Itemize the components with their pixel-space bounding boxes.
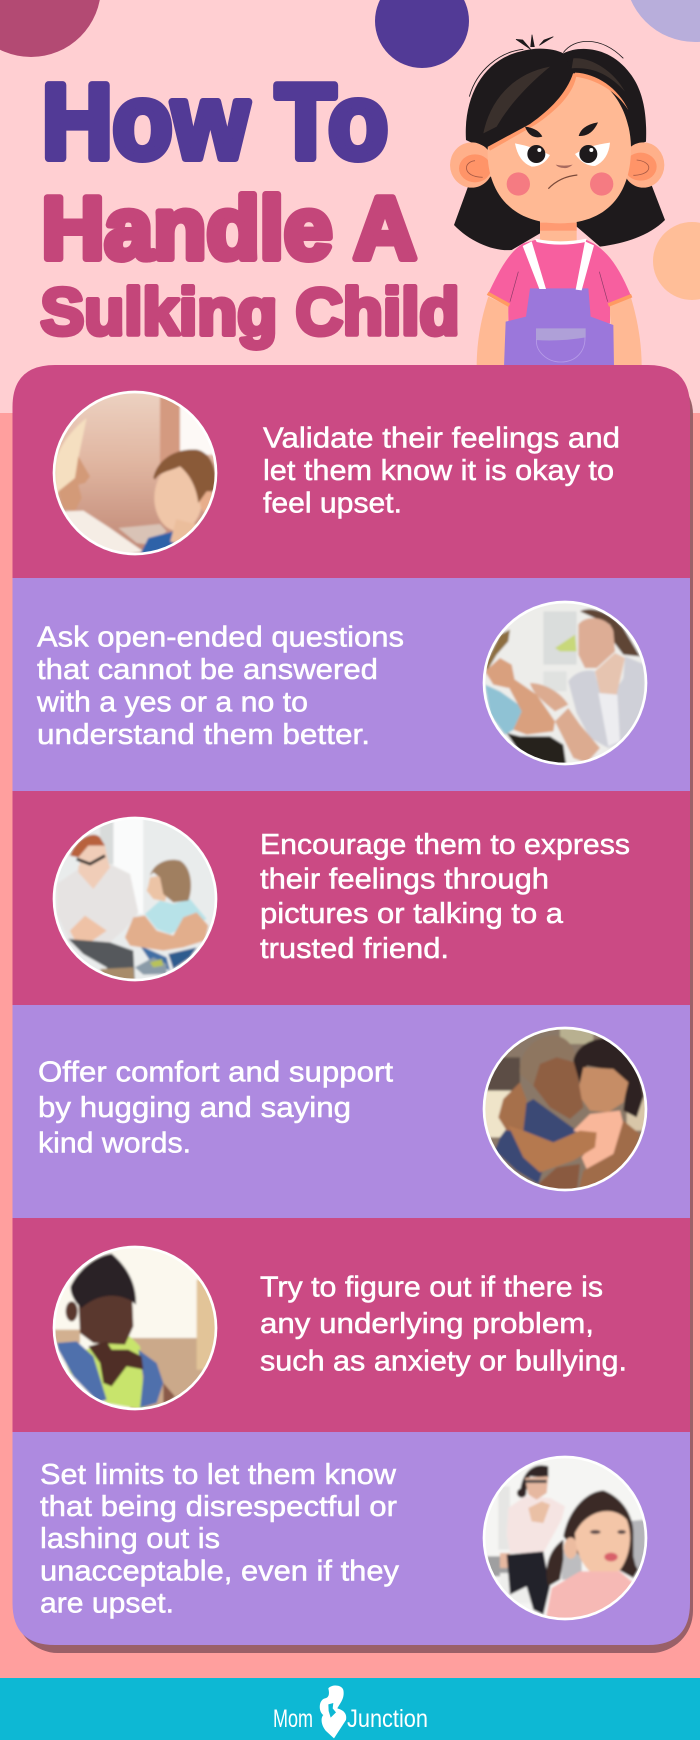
text: set limits: lashing out is xyxy=(40,1523,220,1555)
text: set limits: Set limits to let them know xyxy=(40,1459,396,1491)
title xyxy=(40,63,460,348)
text: offer comfort: kind words. xyxy=(38,1128,191,1160)
decorative circles xyxy=(0,0,700,300)
text: validate feelings: Validate their feelings and xyxy=(263,422,620,454)
text: underlying problem: any underlying problem, xyxy=(260,1308,594,1340)
panel: underlying problem xyxy=(12,1218,690,1432)
logo: MomJunction: Junction xyxy=(347,1705,428,1733)
text: offer comfort: by hugging and saying xyxy=(38,1092,351,1124)
panel: open-ended questions xyxy=(12,578,690,791)
text: validate feelings xyxy=(263,422,620,520)
text: validate feelings: let them know it is okay to xyxy=(263,455,614,487)
icon: mother and child with heart xyxy=(320,1686,346,1738)
photo: mother talking with child xyxy=(480,598,650,768)
text: validate feelings: feel upset. xyxy=(263,488,402,520)
text: open-ended questions: Ask open-ended questions xyxy=(37,622,404,654)
photo: woman and boy sitting xyxy=(50,814,220,984)
text: encourage expression: trusted friend. xyxy=(260,933,449,965)
panel: set limits xyxy=(12,1432,690,1645)
text: open-ended questions: with a yes or a no to xyxy=(36,686,308,718)
panel: offer comfort xyxy=(12,1005,690,1218)
text: open-ended questions: understand them better. xyxy=(37,719,370,751)
logo: MomJunction xyxy=(273,1686,428,1738)
photo: grandmother hugging girl xyxy=(480,1024,650,1194)
footer band xyxy=(0,1678,700,1740)
text: offer comfort: Offer comfort and support xyxy=(38,1056,393,1088)
text: encourage expression: their feelings through xyxy=(260,864,549,896)
photo: sad girl with backpack xyxy=(50,1243,220,1413)
lower background xyxy=(0,413,700,1678)
photo: mother pointing and pouting girl xyxy=(480,1453,650,1623)
header background xyxy=(0,0,700,413)
text: underlying problem xyxy=(260,1272,627,1378)
illustration: sulking girl xyxy=(450,35,665,367)
title: How To xyxy=(42,63,388,181)
text: underlying problem: such as anxiety or bullying. xyxy=(260,1346,627,1378)
text: set limits xyxy=(40,1459,400,1620)
text: set limits: unacceptable, even if they xyxy=(40,1556,400,1588)
panel: validate feelings xyxy=(12,365,690,578)
title: Handle A xyxy=(42,178,416,278)
text: set limits: are upset. xyxy=(40,1588,174,1620)
text: encourage expression xyxy=(260,829,630,965)
text: open-ended questions: that cannot be answered xyxy=(37,654,378,686)
logo: MomJunction: Mom xyxy=(273,1705,313,1733)
text: underlying problem: Try to figure out if there is xyxy=(260,1272,603,1304)
text: open-ended questions xyxy=(36,622,404,751)
text: encourage expression: pictures or talking to a xyxy=(260,898,563,930)
text: offer comfort xyxy=(38,1056,393,1160)
text: encourage expression: Encourage them to express xyxy=(260,829,630,861)
panel: encourage expression xyxy=(12,791,690,1005)
card shadow xyxy=(16,372,693,1653)
text: set limits: that being disrespectful or xyxy=(40,1491,398,1523)
photo: mother and boy xyxy=(50,388,220,558)
title: Sulking Child xyxy=(40,276,460,348)
